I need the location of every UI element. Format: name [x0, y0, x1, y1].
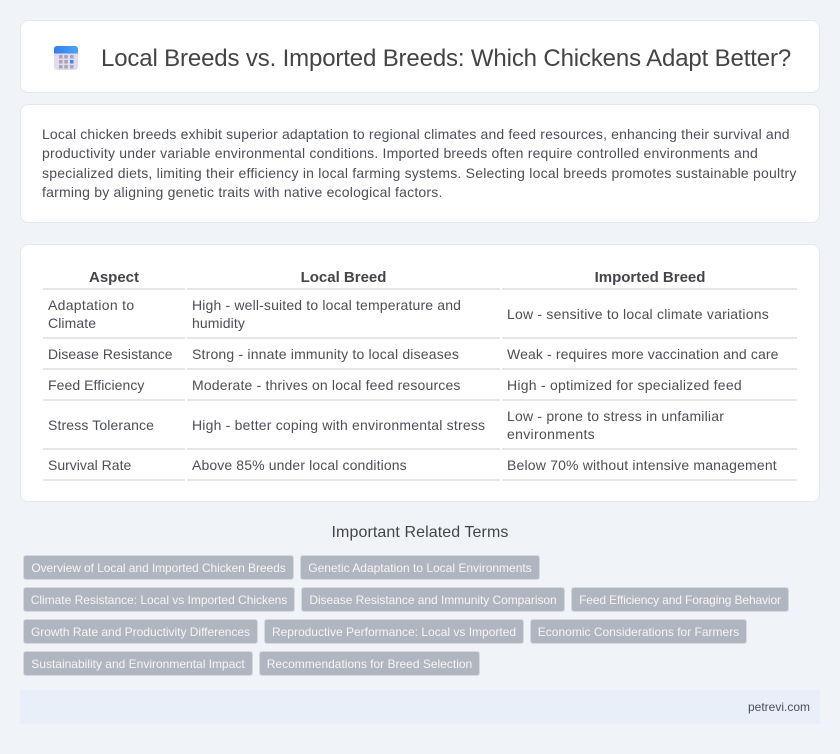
footer site name: petrevi.com — [748, 700, 810, 714]
tag: Genetic Adaptation to Local Environments — [308, 561, 532, 575]
related terms heading: Important Related Terms — [332, 524, 508, 541]
related terms tags — [23, 555, 789, 676]
tag: Feed Efficiency and Foraging Behavior — [579, 593, 781, 607]
row: adaptation to climate: Adaptation to — [48, 297, 134, 313]
tag: Recommendations for Breed Selection — [267, 657, 472, 671]
table header: Aspect — [89, 269, 139, 286]
tag — [530, 619, 747, 644]
row: adaptation to climate: Climate — [48, 315, 96, 331]
tag — [259, 651, 480, 676]
intro paragraph: productivity under variable environmental conditions. Imported breeds often require controlled environments and — [42, 145, 758, 161]
icon: calendar — [54, 46, 78, 70]
title: Local Breeds vs. Imported Breeds: Which Chickens Adapt Better? — [101, 45, 791, 72]
tag — [23, 587, 295, 612]
row: survival rate — [48, 457, 777, 473]
row: feed efficiency: High - optimized for specialized feed — [507, 377, 742, 393]
row: disease resistance — [48, 346, 779, 362]
tag — [23, 651, 253, 676]
tag — [301, 587, 565, 612]
row: stress tolerance: Stress Tolerance — [48, 417, 154, 433]
row: feed efficiency — [48, 377, 742, 393]
tag — [23, 555, 294, 580]
row: survival rate: Survival Rate — [48, 457, 131, 473]
row: stress tolerance: environments — [507, 426, 595, 442]
tag: Sustainability and Environmental Impact — [31, 657, 245, 671]
tag — [300, 555, 540, 580]
row: survival rate: Above 85% under local conditions — [192, 457, 407, 473]
intro paragraph — [42, 126, 797, 200]
intro paragraph card — [20, 104, 820, 223]
tag: Overview of Local and Imported Chicken Breeds — [31, 561, 286, 575]
row: stress tolerance — [48, 408, 724, 442]
row: disease resistance: Weak - requires more vaccination and care — [507, 346, 779, 362]
table header: Imported Breed — [595, 269, 705, 286]
tag: Climate Resistance: Local vs Imported Chickens — [31, 593, 287, 607]
row: adaptation to climate: Low - sensitive to local climate variations — [507, 306, 769, 322]
row: feed efficiency: Feed Efficiency — [48, 377, 145, 393]
tag: Disease Resistance and Immunity Comparison — [309, 593, 557, 607]
intro paragraph: Local chicken breeds exhibit superior adaptation to regional climates and feed resources, enhancing their survival and — [42, 126, 790, 142]
row: disease resistance: Strong - innate immunity to local diseases — [192, 346, 459, 362]
footer bar — [20, 690, 820, 724]
row: disease resistance: Disease Resistance — [48, 346, 173, 362]
table header: Local Breed — [301, 269, 386, 286]
row: stress tolerance: Low - prone to stress in unfamiliar — [507, 408, 724, 424]
tag — [23, 619, 258, 644]
row: survival rate: Below 70% without intensive management — [507, 457, 777, 473]
tag — [264, 619, 524, 644]
tag: Growth Rate and Productivity Differences — [31, 625, 250, 639]
row: adaptation to climate: humidity — [192, 315, 245, 331]
tag: Reproductive Performance: Local vs Imported — [272, 625, 516, 639]
row: feed efficiency: Moderate - thrives on local feed resources — [192, 377, 461, 393]
comparison table card — [20, 244, 820, 502]
tag — [571, 587, 789, 612]
table header — [89, 269, 705, 286]
row: adaptation to climate — [48, 297, 769, 331]
row: stress tolerance: High - better coping with environmental stress — [192, 417, 485, 433]
intro paragraph: farming by aligning genetic traits with native ecological factors. — [42, 184, 443, 200]
tag: Economic Considerations for Farmers — [538, 625, 739, 639]
header card — [20, 20, 820, 93]
row: adaptation to climate: High - well-suited to local temperature and — [192, 297, 461, 313]
intro paragraph: specialized diets, limiting their efficiency in local farming systems. Selecting local breeds promotes sustainable poultry — [42, 165, 797, 181]
